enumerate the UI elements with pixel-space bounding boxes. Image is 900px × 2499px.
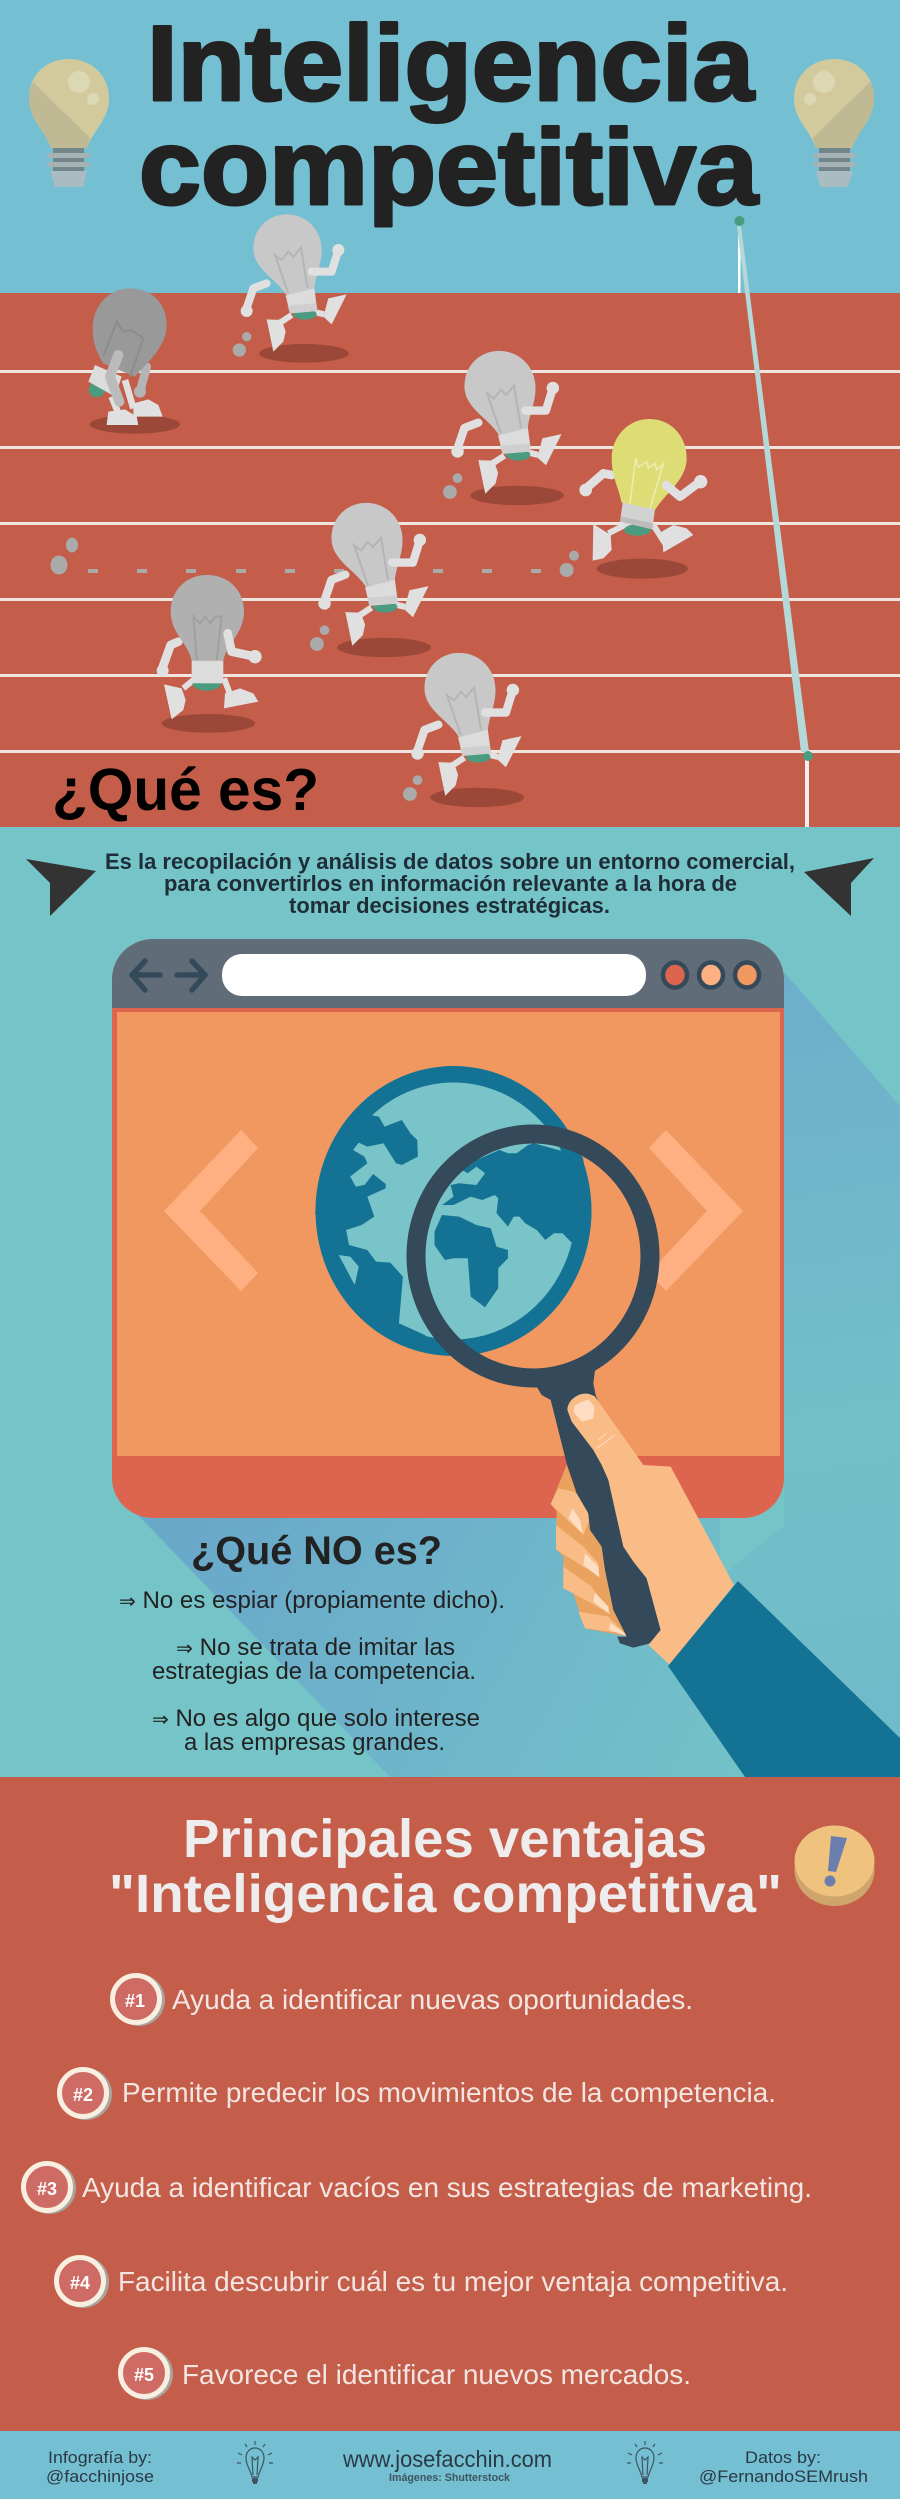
- advantage 1: [112, 1974, 693, 2026]
- runner: bottom bulb: [403, 653, 524, 807]
- badge 5: [120, 2348, 173, 2400]
- chevron left: [164, 1130, 258, 1291]
- footer credit: author: Infografía by:: [48, 2448, 152, 2467]
- advantage 4: [56, 2256, 788, 2308]
- fingers: [551, 1465, 628, 1637]
- footer credit: author: [46, 2448, 154, 2486]
- badge 5: #5: [134, 2365, 154, 2385]
- browser long shadow: [138, 972, 900, 1777]
- runner: grey bulb, front view: [157, 575, 262, 733]
- icon: left light bulb: [29, 59, 109, 187]
- chevron right: [649, 1130, 743, 1291]
- heading: advantages: [109, 1809, 782, 1924]
- list: what it is not: ⇒ No es algo que solo interese: [152, 1705, 480, 1732]
- heading: advantages: "Inteligencia competitiva": [109, 1864, 782, 1924]
- icon: right arrow: [804, 858, 874, 916]
- definition text: para convertirlos en información relevante a la hora de: [164, 871, 737, 896]
- icon: exclamation coin: [794, 1826, 874, 1906]
- advantage 5: Favorece el identificar nuevos mercados.: [182, 2359, 691, 2390]
- badge 3: #3: [37, 2179, 57, 2199]
- definition text: Es la recopilación y análisis de datos sobre un entorno comercial,: [105, 849, 795, 874]
- magnifier handle: [530, 1368, 661, 1648]
- icon: footer bulb left: [237, 2441, 273, 2483]
- definition text: tomar decisiones estratégicas.: [289, 893, 610, 918]
- advantage 5: [120, 2348, 691, 2400]
- advantage 3: [24, 2162, 812, 2214]
- heading: advantages: Principales ventajas: [183, 1809, 707, 1869]
- icon: left arrow: [26, 859, 96, 916]
- advantage 2: [60, 2068, 776, 2120]
- nav arrows: [132, 961, 205, 990]
- palm and thumb: [567, 1394, 734, 1665]
- badge 1: [112, 1974, 165, 2026]
- definition text: [105, 849, 795, 918]
- badge 4: #4: [70, 2273, 90, 2293]
- running track: [0, 293, 900, 827]
- advantage 3: Ayuda a identificar vacíos en sus estrategias de marketing.: [82, 2172, 812, 2203]
- footer credit: data: Datos by:: [745, 2448, 821, 2467]
- badge 1: #1: [125, 1991, 145, 2011]
- icon: footer bulb right: [627, 2441, 663, 2483]
- footer credit: author: @facchinjose: [46, 2467, 154, 2486]
- title: competitiva: [139, 107, 760, 227]
- dashed dust trail: [50, 538, 541, 574]
- runner: top bulb: [233, 214, 349, 363]
- title: Inteligencia: [147, 3, 756, 123]
- heading: Qué NO es: ¿Qué NO es?: [191, 1529, 442, 1573]
- red section background: [0, 1777, 900, 2431]
- list: what it is not: ⇒ No se trata de imitar las: [176, 1634, 455, 1661]
- badge 4: [56, 2256, 109, 2308]
- footer credit: data: @FernandoSEMrush: [699, 2467, 868, 2486]
- footer credit: data: [699, 2448, 868, 2486]
- browser window: [112, 939, 784, 1518]
- runner: dark bulb, back view: [88, 288, 180, 434]
- title: [139, 3, 760, 227]
- badge 2: #2: [73, 2085, 93, 2105]
- runner: third bulb: [443, 351, 564, 505]
- thumb nail: [573, 1399, 594, 1422]
- globe: [315, 1066, 592, 1356]
- footer website: [342, 2446, 552, 2484]
- address bar: [222, 954, 646, 996]
- list: what it is not: [119, 1587, 505, 1756]
- advantage 1: Ayuda a identificar nuevas oportunidades.: [172, 1984, 693, 2015]
- runner: centre bulb: [310, 503, 431, 657]
- window buttons: [663, 962, 759, 988]
- magnifying glass lens ring: [416, 1134, 650, 1378]
- runner: yellow winning bulb: [560, 419, 707, 579]
- sleeve: [668, 1581, 900, 1777]
- finger nails: [568, 1508, 628, 1637]
- hand holding magnifying glass: [530, 1368, 734, 1665]
- heading: Qué es: ¿Qué es?: [52, 757, 319, 823]
- thumb creases: [597, 1433, 615, 1448]
- list: what it is not: ⇒ No es espiar (propiamente dicho).: [119, 1587, 505, 1614]
- footer website: Imágenes: Shutterstock: [389, 2472, 510, 2484]
- badge 3: [24, 2162, 76, 2214]
- badge 2: [60, 2068, 112, 2120]
- finish line pole: [734, 216, 813, 827]
- sky background: [0, 0, 900, 293]
- list: what it is not: estrategias de la competencia.: [152, 1658, 476, 1685]
- list: what it is not: a las empresas grandes.: [184, 1729, 445, 1756]
- footer website: www.josefacchin.com: [342, 2446, 552, 2472]
- advantage 4: Facilita descubrir cuál es tu mejor ventaja competitiva.: [118, 2266, 788, 2297]
- teal section background: [0, 827, 900, 1777]
- icon: right light bulb: [794, 59, 874, 187]
- advantage 2: Permite predecir los movimientos de la competencia.: [122, 2077, 776, 2108]
- footer background: [0, 2431, 900, 2499]
